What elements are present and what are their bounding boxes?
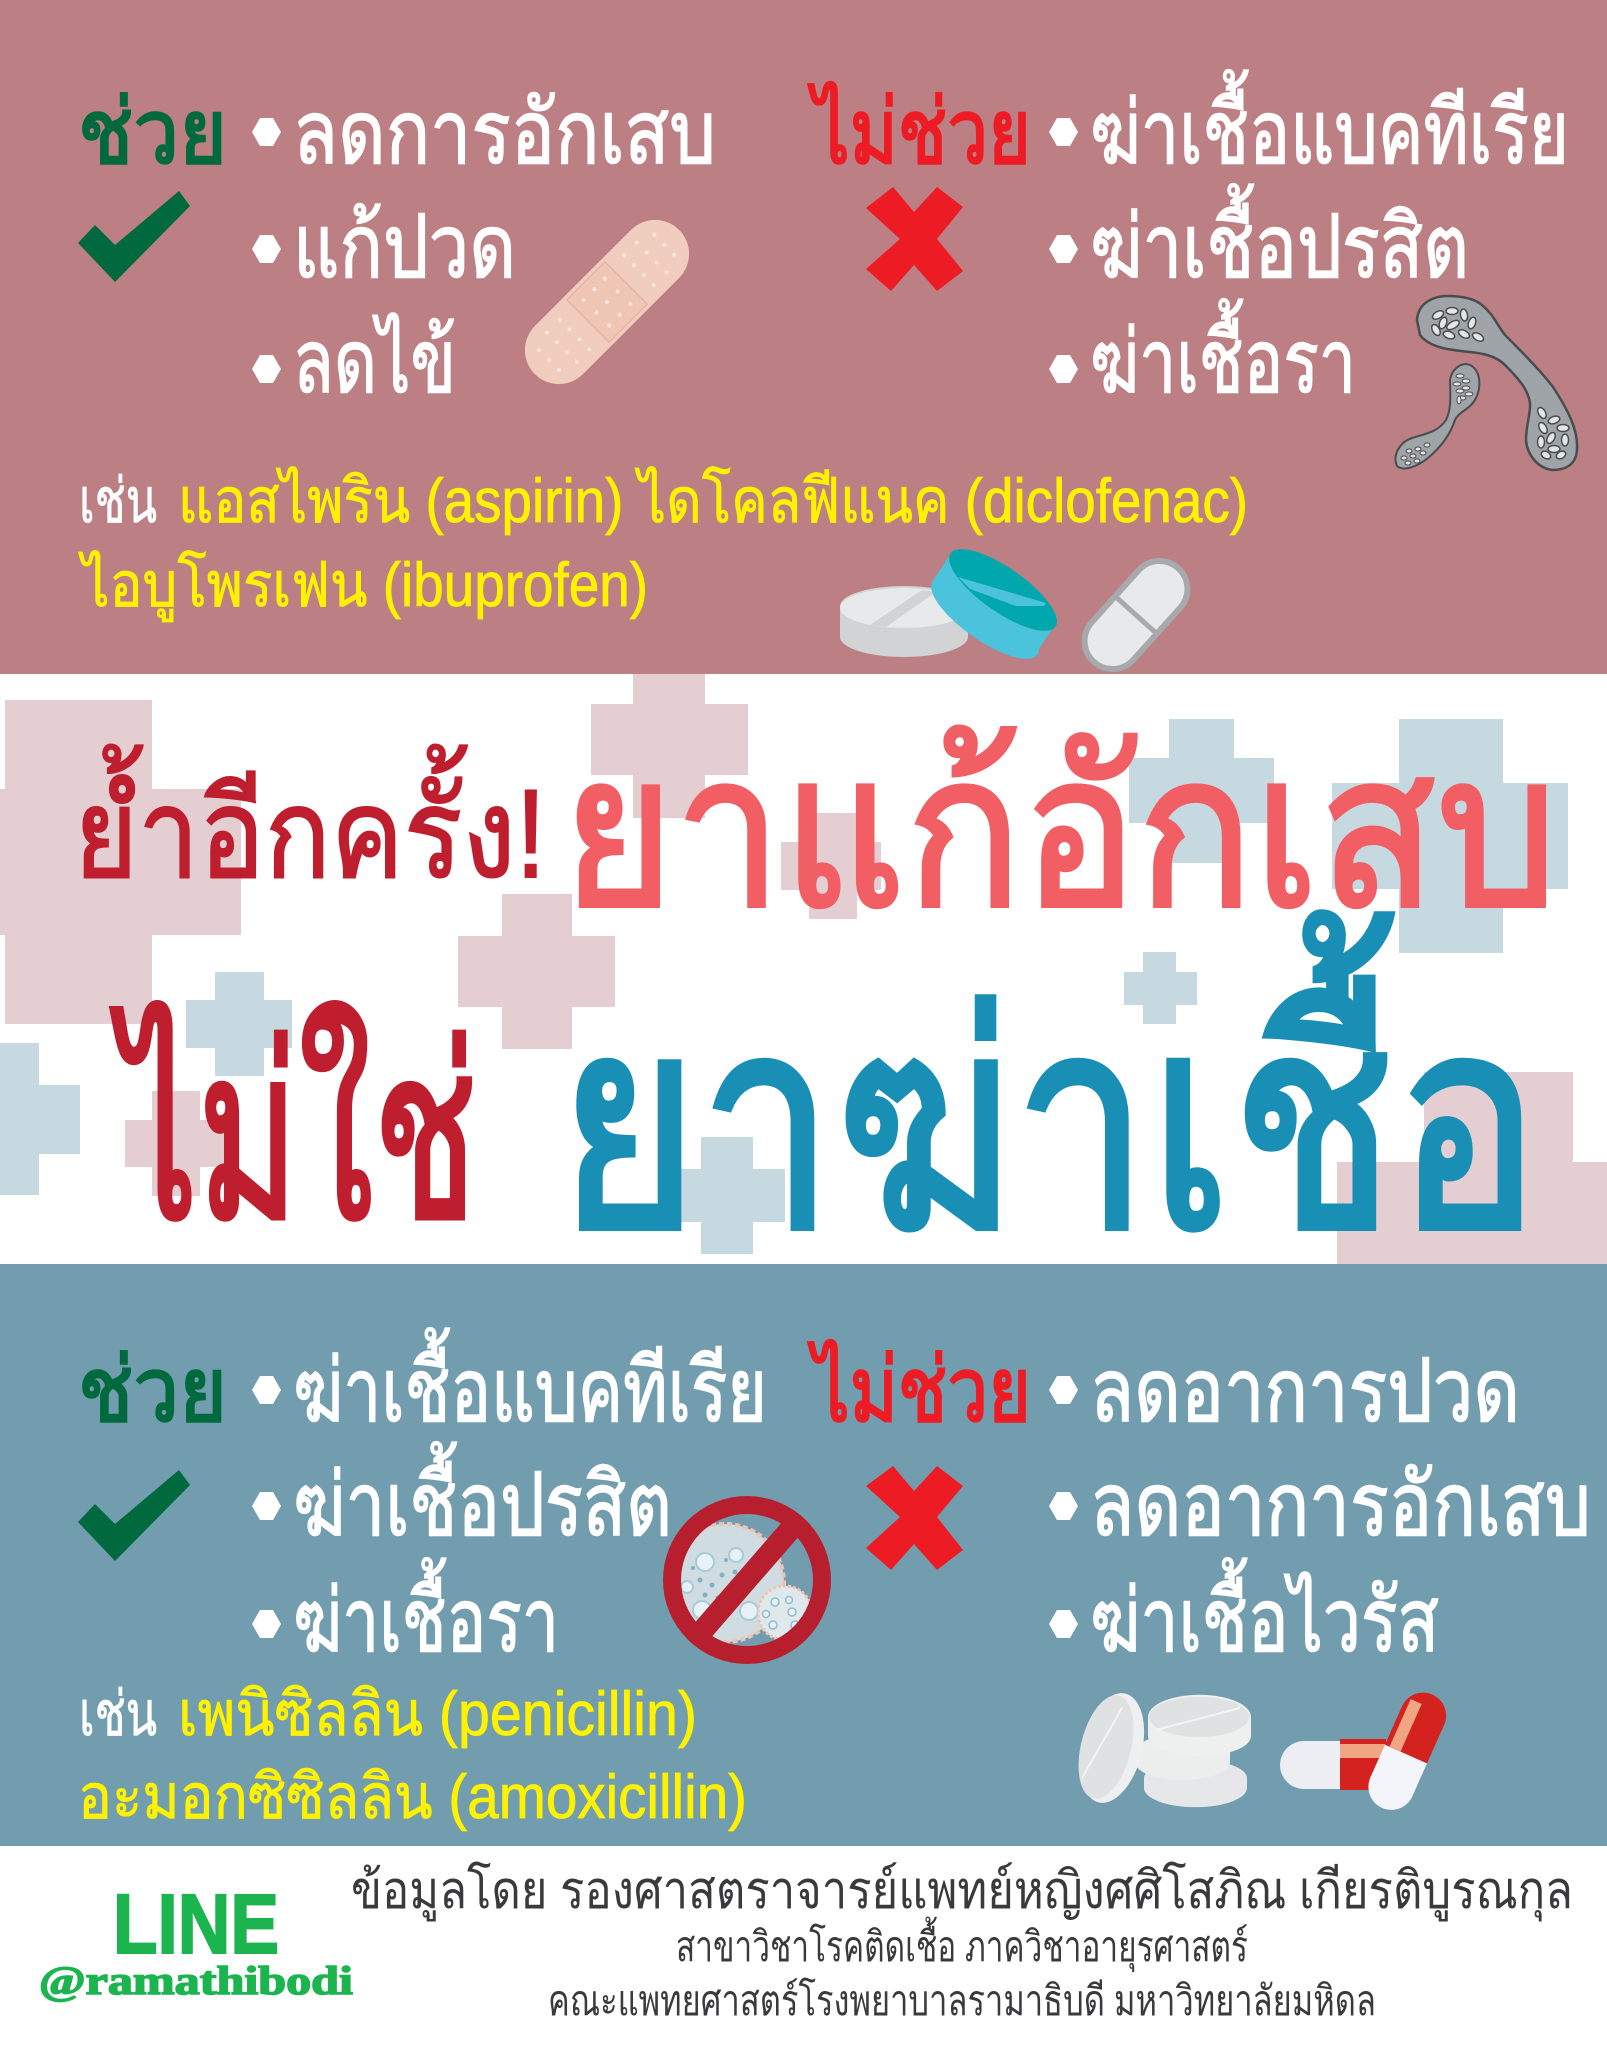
- icon: white tablet: [840, 586, 968, 657]
- list: helps items: ฆ่าเชื้อปรสิต: [293, 1442, 672, 1554]
- list: does not help items: ฆ่าเชื้อไวรัส: [1090, 1558, 1439, 1670]
- examples: NSAID drug names: [78, 466, 1248, 622]
- list: helps items: ฆ่าเชื้อรา: [293, 1558, 559, 1670]
- icon: bandage: [511, 206, 703, 398]
- heading: does not help: ไม่ช่วย: [808, 1340, 1031, 1441]
- icon: red cross mark: [866, 187, 963, 291]
- examples: antibiotic drug names: [78, 1680, 747, 1832]
- icon: red cross mark: [866, 1466, 963, 1570]
- heading: does not help: ไม่ช่วย: [808, 82, 1031, 183]
- icon: red and white capsules: [1280, 1685, 1453, 1817]
- panel: anti-inflammatory drugs: [0, 0, 1607, 681]
- icon: no germs sign: [666, 1505, 822, 1655]
- list: does not help items: ลดอาการปวด: [1090, 1341, 1520, 1440]
- list: helps items: [252, 1328, 767, 1670]
- heading: helps: ช่วย: [78, 1341, 227, 1441]
- examples: antibiotic drug names: เช่น: [79, 1680, 157, 1749]
- list: helps items: ฆ่าเชื้อแบคทีเรีย: [293, 1328, 767, 1440]
- examples: antibiotic drug names: อะมอกซิซิลลิน (amoxicillin): [78, 1763, 747, 1832]
- examples: NSAID drug names: เช่น: [79, 467, 157, 536]
- heading: helps: ช่วย: [78, 83, 227, 183]
- footer: source credit: สาขาวิชาโรคติดเชื้อ ภาควิชาอายุรศาสตร์: [676, 1916, 1248, 1973]
- list: does not help items: ฆ่าเชื้อรา: [1090, 299, 1356, 411]
- background: pale medical crosses: [0, 674, 1607, 1264]
- icon: grey capsule: [1073, 549, 1199, 681]
- examples: NSAID drug names: แอสไพริน (aspirin) ไดโคลฟีแนค (diclofenac): [178, 466, 1248, 536]
- icon: fungus spores: [1395, 296, 1577, 470]
- headline: are not: ไม่ใช่: [111, 1001, 477, 1269]
- footer: LINE account: @ramathibodi: [39, 1958, 353, 2003]
- panel: antibiotic drugs: [0, 1264, 1607, 1846]
- icon: stacked tablets: [1069, 1686, 1251, 1810]
- list: helps items: แก้ปวด: [293, 197, 516, 296]
- examples: antibiotic drug names: เพนิซิลลิน (penicillin): [178, 1680, 697, 1749]
- list: does not help items: [1049, 70, 1569, 411]
- icon: teal tablet: [920, 535, 1068, 673]
- list: does not help items: ฆ่าเชื้อปรสิต: [1090, 184, 1469, 296]
- icon: check mark: [78, 191, 190, 282]
- icon: check mark: [78, 1470, 190, 1561]
- footer: LINE account: [39, 1877, 353, 2003]
- list: helps items: ลดการอักเสบ: [293, 83, 716, 182]
- footer: source credit: คณะแพทยศาสตร์โรงพยาบาลรามาธิบดี มหาวิทยาลัยมหิดล: [548, 1976, 1376, 2024]
- footer: source credit: [351, 1861, 1573, 2024]
- footer: LINE account: LINE: [113, 1877, 279, 1971]
- list: does not help items: [1049, 1341, 1591, 1670]
- examples: NSAID drug names: ไอบูโพรเฟน (ibuprofen): [78, 550, 648, 622]
- list: helps items: ลดไข้: [293, 312, 456, 411]
- list: helps items: [252, 83, 716, 411]
- headline: repeat once more: ย้ำอีกครั้ง!: [74, 744, 546, 904]
